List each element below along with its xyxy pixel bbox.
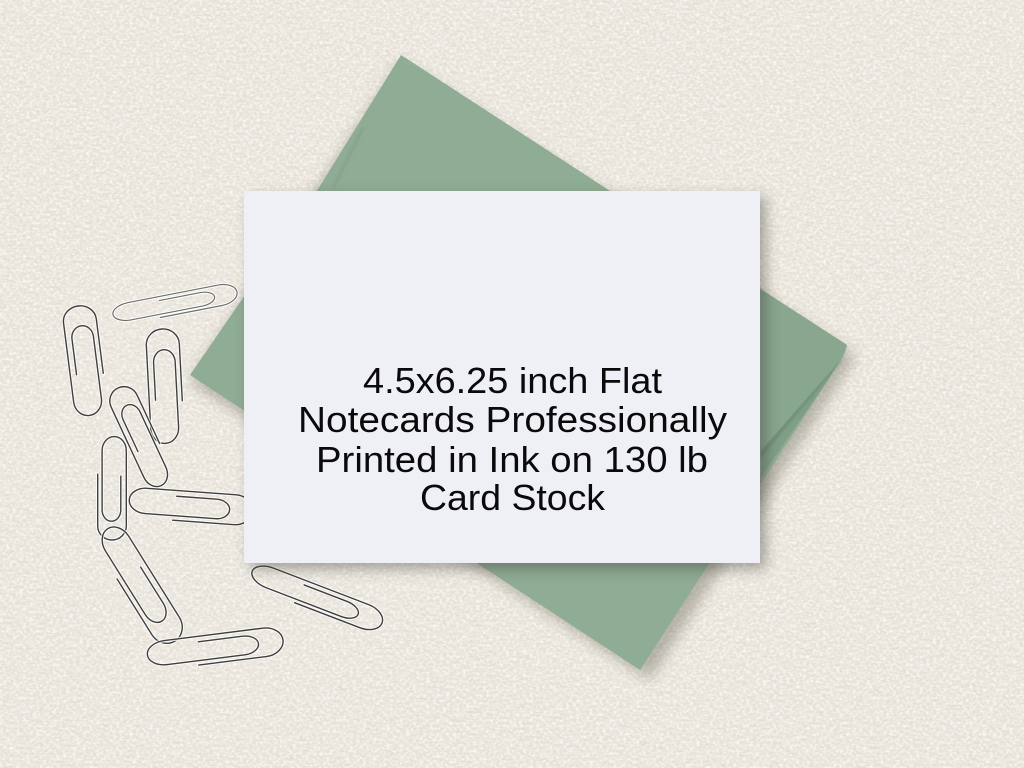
paperclip 3 [146,328,184,444]
paperclip 4 [105,382,176,491]
card text: Card Stock [420,477,606,518]
green envelope [190,55,856,680]
paperclips [62,282,386,671]
paperclip 8 [247,561,386,635]
card text [298,360,727,518]
card text: 4.5x6.25 inch Flat [363,360,662,401]
paperclip 2 [111,282,239,326]
card text: Printed in Ink on 130 lb [316,439,708,480]
paperclip 9 [146,626,285,671]
paperclip 1 [62,304,108,417]
notecard [244,191,766,569]
paperclip 7 [92,521,189,650]
card text: Notecards Professionally [298,399,727,440]
paperclip 6 [128,487,253,526]
paperclip 5 [98,437,126,540]
